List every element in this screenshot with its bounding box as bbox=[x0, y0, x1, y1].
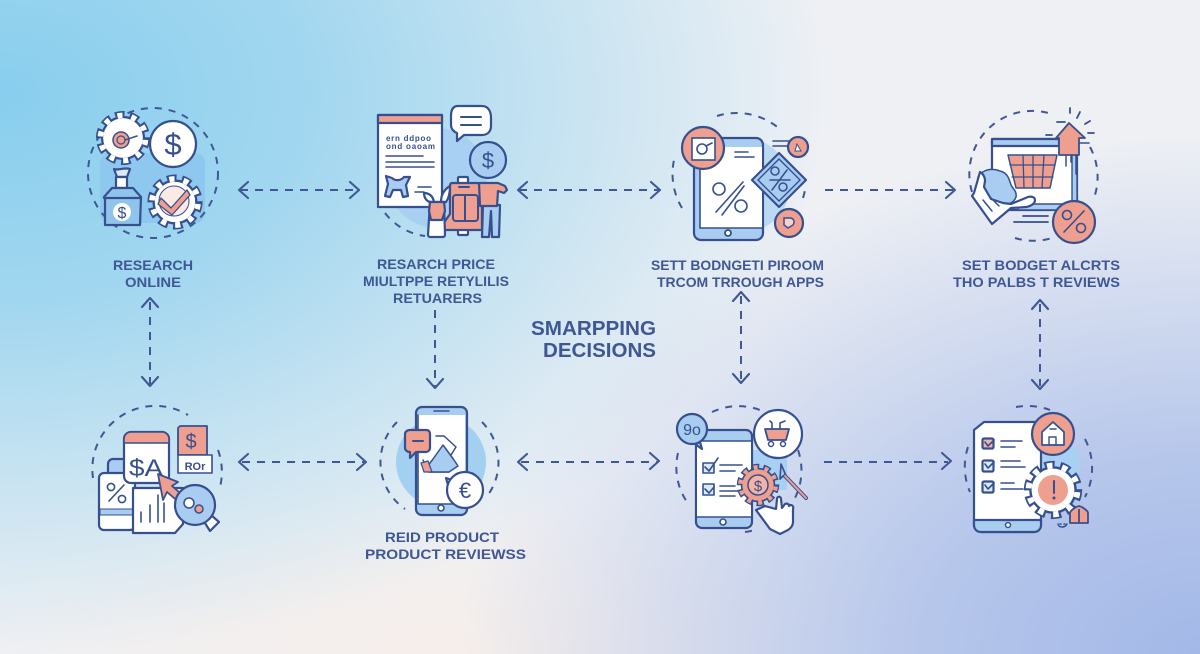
arrow: apps to alerts bbox=[825, 182, 955, 198]
title bbox=[531, 318, 656, 362]
dollar coin: $ bbox=[482, 148, 494, 173]
label: read product reviews: REID PRODUCT bbox=[385, 529, 499, 545]
icon: product reviews phone bbox=[380, 407, 498, 515]
minus bubble bbox=[405, 430, 430, 458]
icon: money bag: $ bbox=[118, 205, 127, 222]
product lines bbox=[1014, 216, 1048, 222]
camera badge bbox=[682, 127, 724, 169]
house badge bbox=[1032, 413, 1074, 455]
label: set budget apps: SETT BODNGETI PIROOM bbox=[651, 257, 824, 273]
icon: comparison charts bbox=[92, 406, 222, 533]
percent tag bbox=[752, 153, 806, 207]
dollar gear: $ bbox=[754, 478, 763, 495]
label: set budget apps: TRCOM TRROUGH APPS bbox=[657, 274, 824, 290]
small ornament bbox=[1058, 524, 1067, 527]
house product bbox=[421, 436, 458, 472]
hand bbox=[972, 169, 1035, 224]
phone bbox=[416, 407, 467, 515]
label: set budget apps bbox=[651, 257, 824, 290]
document: ond oaoam bbox=[386, 142, 435, 151]
small badges bbox=[773, 137, 808, 237]
label: set budget alerts bbox=[953, 257, 1120, 290]
document bbox=[378, 115, 442, 207]
tablet bbox=[696, 430, 752, 528]
title: DECISIONS bbox=[543, 340, 656, 362]
small house bbox=[1070, 506, 1088, 523]
label: set budget alerts: SET BODGET ALCRTS bbox=[962, 257, 1120, 273]
dollar bubble: ROr bbox=[185, 461, 206, 473]
document: ern ddpoo bbox=[386, 134, 431, 143]
arrow: apps to checklist bbox=[733, 292, 749, 383]
icon: tablet apps bbox=[673, 113, 808, 240]
arrow: price to reviews bbox=[427, 310, 443, 388]
speech bubble bbox=[451, 106, 491, 141]
label: read product reviews bbox=[365, 529, 526, 562]
check rows bbox=[982, 438, 1025, 492]
backpack bbox=[443, 177, 482, 235]
arrow: checklist to tasks bbox=[824, 453, 951, 469]
check rows bbox=[703, 458, 742, 496]
euro coin: € bbox=[459, 478, 471, 503]
label: research online: ONLINE bbox=[125, 274, 181, 290]
arrow: research to price bbox=[239, 182, 359, 198]
pointing hand bbox=[756, 497, 793, 534]
label: read product reviews: PRODUCT REVIEWSS bbox=[365, 546, 526, 562]
arrow: reviews to checklist bbox=[518, 453, 659, 470]
bottle bbox=[424, 186, 450, 237]
percent badge bbox=[1053, 201, 1095, 243]
browser window bbox=[992, 139, 1077, 210]
arrow: comparison to reviews bbox=[239, 454, 366, 470]
dollar card: $A bbox=[129, 455, 163, 482]
dollar bubble bbox=[178, 426, 212, 473]
label: research online: RESEARCH bbox=[113, 257, 193, 273]
checklist document bbox=[974, 422, 1041, 532]
arrow: research online to comparison bbox=[142, 298, 158, 386]
badge ninety: 9o bbox=[683, 422, 701, 439]
icon: check gear bbox=[151, 178, 199, 226]
arrow: alerts to tasks bbox=[1032, 300, 1048, 389]
pencil arrow bbox=[780, 464, 806, 498]
alert gear bbox=[1028, 465, 1078, 515]
person bbox=[479, 183, 507, 237]
icon: research online bbox=[88, 108, 218, 238]
label: research price bbox=[363, 256, 509, 306]
label: research price: MIULTPPE RETYLILIS bbox=[363, 273, 509, 289]
title: SMARPPING bbox=[531, 318, 656, 340]
cart badge bbox=[754, 410, 802, 458]
cursor arrow bbox=[158, 474, 186, 504]
dollar bubble: $ bbox=[185, 431, 197, 453]
chart document bbox=[133, 488, 183, 533]
basket bbox=[1008, 155, 1057, 188]
percent card bbox=[99, 459, 135, 530]
label: research online bbox=[113, 257, 193, 290]
label: research price: RETUARERS bbox=[393, 290, 482, 306]
label: research price: RESARCH PRICE bbox=[377, 256, 495, 272]
icon: research price bbox=[378, 106, 507, 237]
arrow: price to apps bbox=[518, 182, 660, 198]
icon: target gear bbox=[100, 115, 146, 161]
icon: task alerts bbox=[965, 406, 1092, 532]
tablet bbox=[694, 138, 763, 240]
icon: dollar coin: $ bbox=[164, 127, 182, 162]
icon: shopping screen bbox=[969, 108, 1098, 243]
icon: checklist tablet bbox=[676, 406, 806, 534]
magnifier bbox=[175, 485, 219, 531]
house arrow bbox=[1056, 123, 1089, 174]
label: set budget alerts: THO PALBS T REVIEWS bbox=[953, 274, 1120, 290]
